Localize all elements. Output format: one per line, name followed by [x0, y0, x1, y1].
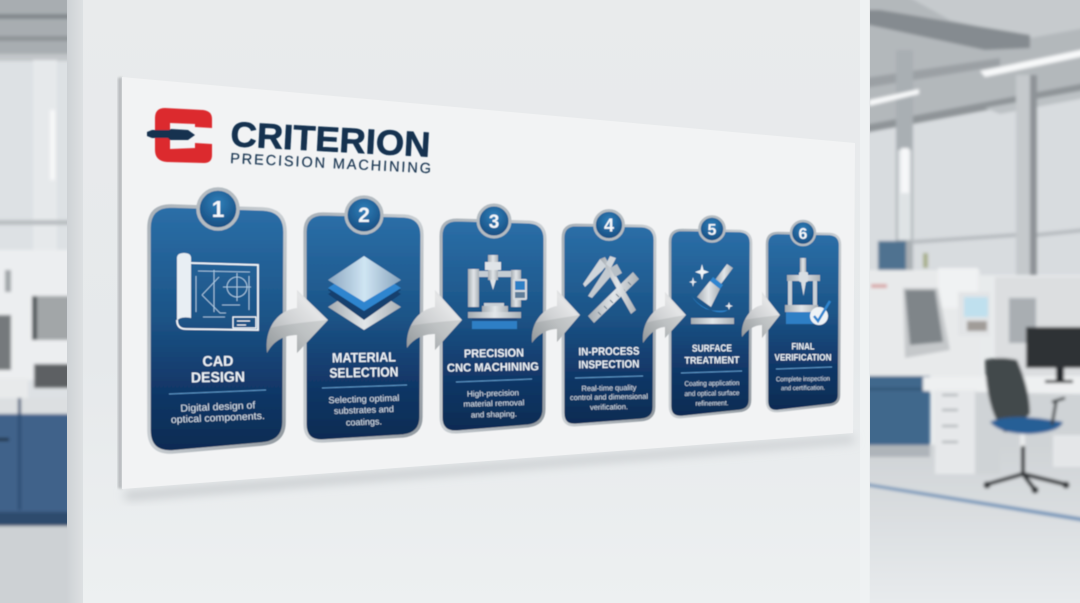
- title: MATERIAL: [332, 349, 396, 366]
- description: Real-time quality: [581, 383, 637, 393]
- panel: step 2 Material Selection: SELECTION: [329, 364, 399, 381]
- panel: step 1 CAD Design: optical components.: [171, 411, 265, 426]
- badge 1: [198, 189, 238, 229]
- panel: step 5 Surface Treatment: TREATMENT: [684, 355, 740, 367]
- panel: step 4 In-Process Inspection: [563, 210, 655, 425]
- title: IN-PROCESS: [578, 346, 640, 358]
- arrow: step 2 to 3: [407, 290, 462, 350]
- wall: [67, 0, 870, 603]
- badge 5: 5: [708, 222, 717, 239]
- icon: material layers: [328, 256, 401, 330]
- panel: step 1 CAD Design: [149, 189, 285, 452]
- badge 1: 1: [212, 196, 225, 222]
- badge 4: 4: [604, 216, 614, 236]
- card: [670, 230, 751, 417]
- panel: step 5 Surface Treatment: [670, 216, 751, 417]
- panel: step 3 Precision CNC Machining: [441, 205, 545, 432]
- background: factory at right: [860, 0, 1080, 603]
- panel: step 6 Final Verification: and certification.: [781, 385, 825, 392]
- panel: step 3 Precision CNC Machining: CNC MACHINING: [447, 361, 539, 375]
- card: [767, 233, 840, 411]
- panel: step 6 Final Verification: [767, 221, 840, 411]
- icon: CNC machine: [468, 255, 527, 329]
- sign board: [118, 77, 855, 500]
- panel: step 1 CAD Design: DESIGN: [191, 370, 245, 386]
- icon: measuring machine with check: [785, 258, 830, 325]
- logo: Criterion Precision Machining: [147, 108, 431, 177]
- description: Digital design of: [180, 400, 256, 415]
- panel: step 4 In-Process Inspection: INSPECTION: [578, 359, 640, 371]
- panel: step 2 Material Selection: coatings.: [346, 416, 382, 428]
- badge 2: [346, 197, 382, 233]
- arrow: step 3 to 4: [532, 290, 580, 343]
- panel: step 6 Final Verification: VERIFICATION: [774, 352, 832, 364]
- card: [441, 220, 545, 432]
- tagline: PRECISION MACHINING: [230, 151, 431, 177]
- icon: blueprint: [177, 253, 258, 330]
- panel: step 4 In-Process Inspection: verification.: [590, 402, 628, 412]
- card: [305, 214, 422, 441]
- card: [563, 225, 655, 425]
- badge 4: [594, 210, 624, 240]
- panel: step 5 Surface Treatment: and optical surface: [684, 390, 740, 398]
- title: FINAL: [792, 342, 815, 352]
- badge 5: [700, 216, 724, 242]
- panel: step 5 Surface Treatment: refinement.: [695, 400, 729, 408]
- background: factory at left: [0, 0, 70, 603]
- title: SURFACE: [692, 343, 732, 355]
- icon: caliper and ruler: [583, 256, 639, 323]
- arrow: step 1 to 2: [267, 290, 328, 353]
- panel: step 3 Precision CNC Machining: and shaping.: [471, 409, 517, 420]
- card: [149, 206, 285, 452]
- panel: step 2 Material Selection: substrates and: [334, 404, 394, 416]
- title: PRECISION: [464, 347, 524, 361]
- arrow: step 5 to 6: [742, 292, 780, 338]
- description: Coating application: [684, 380, 740, 388]
- description: Selecting optimal: [328, 393, 400, 405]
- badge 3: [478, 205, 510, 237]
- badge 6: [791, 221, 815, 245]
- description: Complete inspection: [776, 376, 830, 383]
- icon: brush and sparkles: [689, 264, 734, 324]
- arrow: step 4 to 5: [643, 292, 686, 343]
- badge 6: 6: [799, 226, 808, 243]
- wordmark: CRITERION: [230, 115, 431, 165]
- description: High-precision: [467, 388, 519, 399]
- panel: step 3 Precision CNC Machining: material removal: [463, 398, 525, 409]
- badge 3: 3: [489, 212, 499, 233]
- icon: red C with spindle: [147, 108, 212, 163]
- badge 2: 2: [358, 204, 370, 227]
- panel: step 4 In-Process Inspection: control and dimensional: [570, 392, 648, 402]
- panel: step 2 Material Selection: [305, 197, 422, 441]
- title: CAD: [202, 354, 234, 370]
